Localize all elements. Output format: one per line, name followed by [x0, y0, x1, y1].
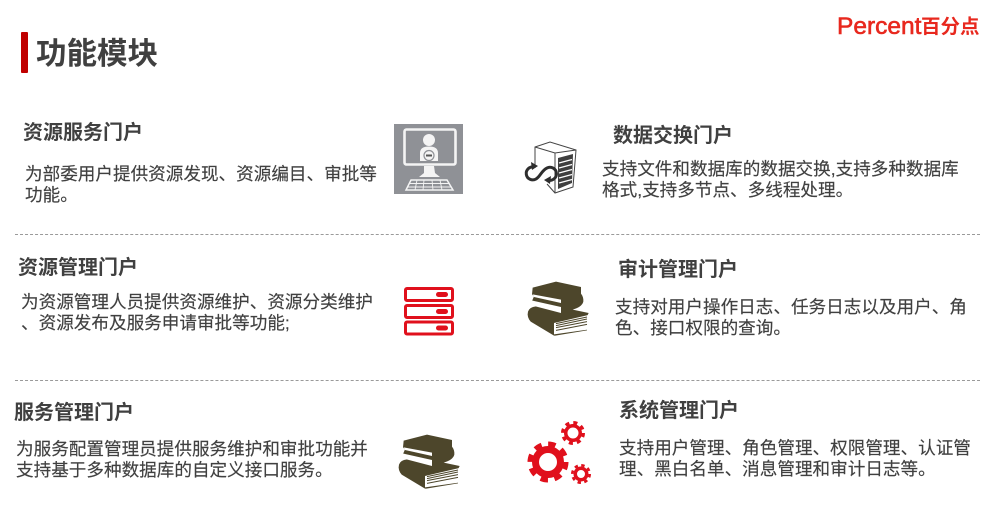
description: 为服务配置管理员提供服务维护和审批功能并	[16, 439, 368, 459]
heading: 审计管理门户	[618, 259, 738, 281]
heading: 资源管理门户	[18, 257, 138, 279]
description	[619, 438, 971, 479]
description: 为资源管理人员提供资源维护、资源分类维护	[21, 292, 373, 312]
description: 功能。	[25, 185, 78, 205]
description: 理、黑白名单、消息管理和审计日志等。	[619, 459, 936, 479]
description	[21, 292, 373, 333]
description: 支持基于多种数据库的自定义接口服务。	[16, 460, 333, 480]
heading: 资源服务门户	[23, 122, 143, 144]
title accent bar	[21, 32, 28, 73]
heading: 系统管理门户	[619, 400, 739, 422]
icon: stacked books	[398, 434, 460, 489]
description: 支持用户管理、角色管理、权限管理、认证管	[619, 438, 971, 458]
icon: monitor with user	[394, 124, 463, 194]
logo: Percent 百分点: Percent	[837, 13, 921, 40]
panel: 资源管理门户	[18, 256, 373, 333]
description: 、资源发布及服务申请审批等功能;	[21, 313, 290, 333]
heading: 服务管理门户	[14, 402, 134, 424]
description	[25, 164, 377, 205]
panel: 服务管理门户	[14, 402, 368, 480]
divider	[15, 234, 980, 235]
icon: server with sync arrows	[524, 142, 576, 194]
icon: gears	[528, 421, 591, 484]
panel: 资源服务门户	[23, 122, 377, 205]
description: 格式,支持多节点、多线程处理。	[602, 180, 853, 200]
divider	[15, 380, 980, 381]
description: 为部委用户提供资源发现、资源编目、审批等	[25, 164, 377, 184]
heading: 数据交换门户	[613, 125, 733, 147]
panel: 系统管理门户	[619, 400, 971, 479]
description: 支持对用户操作日志、任务日志以及用户、角	[615, 297, 967, 317]
title: 功能模块	[36, 37, 158, 71]
description	[602, 159, 959, 200]
description: 色、接口权限的查询。	[615, 318, 791, 338]
logo: Percent 百分点: 百分点	[921, 16, 980, 38]
description: 支持文件和数据库的数据交换,支持多种数据库	[602, 159, 959, 179]
panel: 审计管理门户	[615, 258, 967, 338]
panel: 数据交换门户	[602, 124, 959, 200]
icon: stacked books	[528, 282, 589, 336]
logo: Percent 百分点	[837, 13, 980, 40]
description	[615, 297, 967, 338]
description	[16, 439, 368, 480]
icon: server stack	[404, 287, 454, 336]
